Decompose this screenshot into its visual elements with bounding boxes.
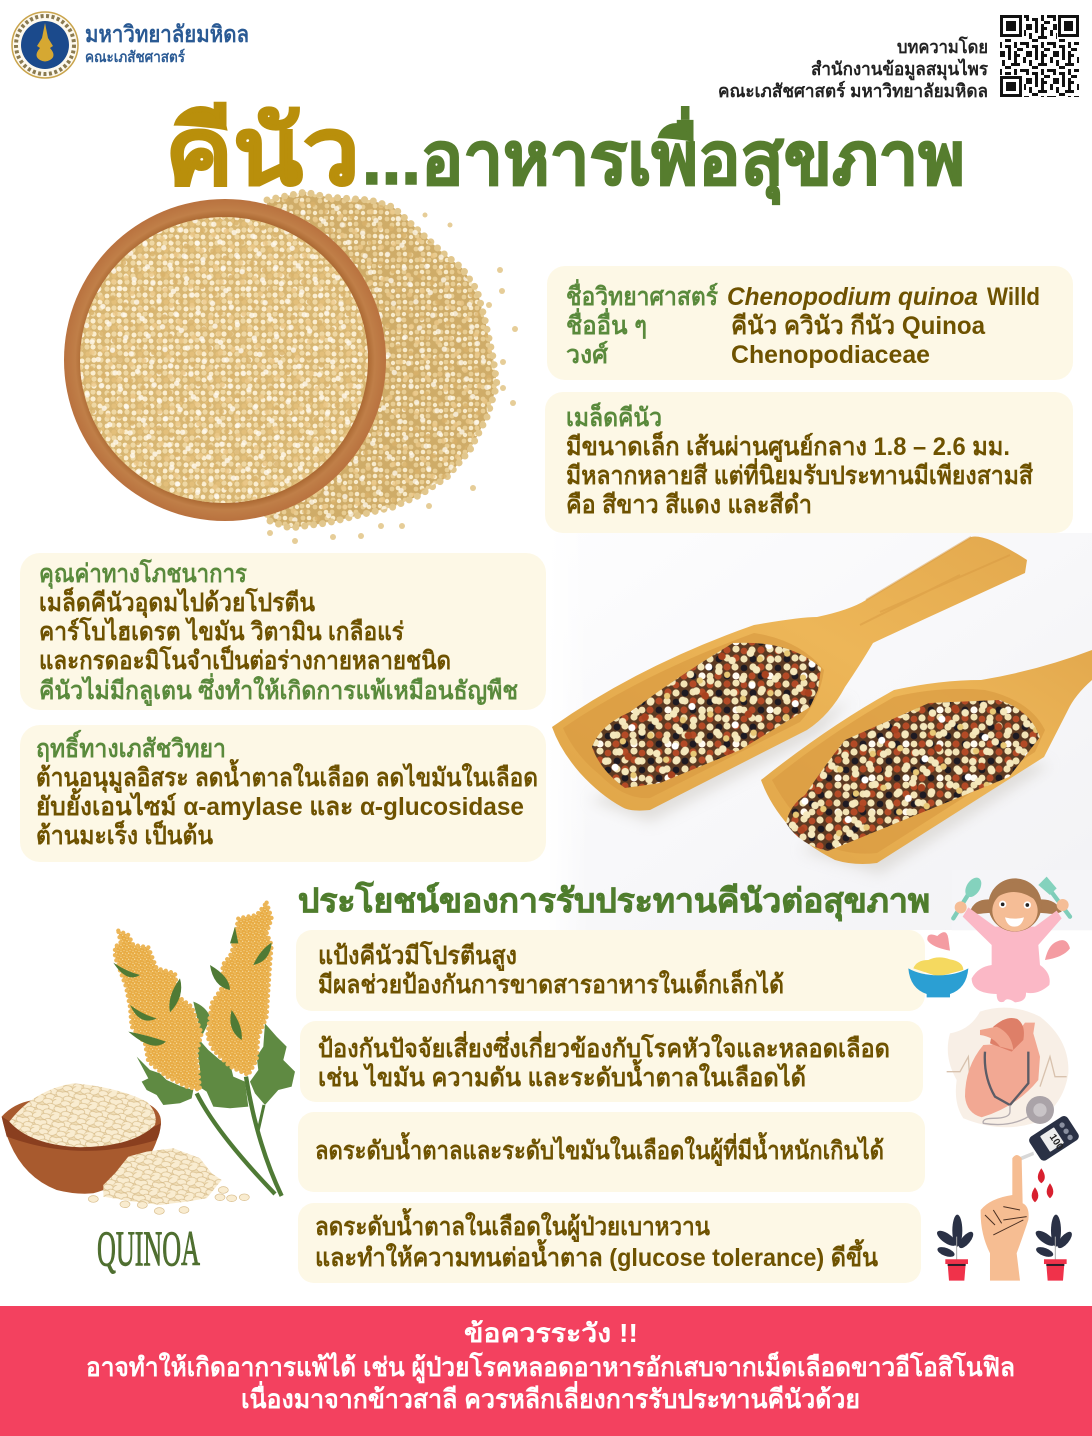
blood drops (1032, 1168, 1053, 1202)
panel: nutritional value: คาร์โบไฮเดรต ไขมัน วิตามิน เกลือแร่ (39, 616, 405, 646)
warning banner: เนื่องมาจากข้าวสาลี ควรหลีกเลี่ยงการรับประทานคีนัวด้วย (241, 1380, 860, 1414)
body (963, 907, 1062, 1002)
panel: quinoa seeds (545, 392, 1073, 533)
panel: nutritional value: คีนัวไม่มีกลูเตน ซึ่งทำให้เกิดการแพ้เหมือนธัญพืช (39, 673, 518, 707)
panel: quinoa seeds: เมล็ดคีนัว (566, 402, 662, 432)
panel: pharmacology: ยับยั้งเอนไซม์ α-amylase และ α-glucosidase (36, 787, 524, 821)
title: ...อาหารเพื่อสุขภาพ (362, 106, 965, 205)
panel: benefit 1: แป้งคีนัวมีโปรตีนสูง (318, 940, 517, 972)
panel: scientific name: Willd (987, 283, 1040, 311)
warning banner (0, 1306, 1092, 1436)
right scoop (761, 650, 1092, 864)
credit text: บทความโดย (897, 36, 988, 57)
stems (197, 1077, 282, 1196)
bowl (2, 1100, 161, 1194)
glucose meter (1027, 1114, 1081, 1162)
credit text: คณะเภสัชศาสตร์ มหาวิทยาลัยมหิดล (718, 80, 988, 101)
panel: scientific name: ชื่อวิทยาศาสตร์ (566, 279, 719, 311)
illustration: child eating (908, 870, 1092, 1002)
plume left (115, 931, 202, 1090)
panel: nutritional value: คุณค่าทางโภชนาการ (39, 558, 248, 590)
panel: scientific name: คีนัว ควินัว กีนัว Quinoa (731, 312, 986, 340)
panel: benefit 1: มีผลช่วยป้องกันการขาดสารอาหารในเด็กเล็กได้ (318, 969, 784, 999)
panel: quinoa seeds: มีหลากหลายสี แต่ที่นิยมรับประทานมีเพียงสามสี (566, 458, 1034, 490)
panel: benefit 4: และทำให้ความทนต่อน้ำตาล (glucose tolerance) ดีขึ้น (315, 1238, 878, 1272)
potted plant left (935, 1215, 976, 1281)
panel: scientific name: วงศ์ (566, 340, 609, 369)
panel: scientific name: Chenopodiaceae (731, 341, 930, 369)
credit text: สำนักงานข้อมูลสมุนไพร (811, 58, 988, 81)
illustration: heart and stethoscope (947, 1008, 1068, 1127)
panel: benefit 1 (296, 930, 925, 1011)
bowl of porridge (913, 957, 963, 977)
panel: benefit 2: เช่น ไขมัน ความดัน และระดับน้ำตาลในเลือดได้ (318, 1058, 806, 1092)
heading: health benefits: ประโยชน์ของการรับประทานคีนัวต่อสุขภาพ (298, 881, 930, 922)
credit text (718, 36, 988, 101)
panel: benefit 3: ลดระดับน้ำตาลและระดับไขมันในเลือดในผู้ที่มีน้ำหนักเกินได้ (315, 1131, 884, 1167)
photo: wooden scoops with mixed quinoa (548, 533, 1092, 930)
panel: benefit 4: ลดระดับน้ำตาลในเลือดในผู้ป่วยเบาหวาน (315, 1207, 710, 1243)
grains in bowl (9, 1083, 156, 1147)
potted plant right (1033, 1215, 1074, 1281)
panel: benefit 4 (298, 1203, 921, 1283)
panel: benefit 2: ป้องกันปัจจัยเสี่ยงซึ่งเกี่ยวข้องกับโรคหัวใจและหลอดเลือด (318, 1031, 890, 1063)
panel: nutritional value (20, 553, 546, 710)
left scoop (552, 536, 1027, 811)
title (165, 99, 965, 205)
label: QUINOA: QUINOA (97, 1220, 200, 1276)
panel: scientific name: Chenopodium quinoa (727, 283, 978, 311)
panel: scientific name: ชื่ออื่น ๆ (566, 308, 647, 340)
panel: pharmacology: ฤทธิ์ทางเภสัชวิทยา (36, 729, 226, 763)
illustration: blood glucose test (935, 1114, 1081, 1281)
panel: pharmacology: ต้านมะเร็ง เป็นต้น (36, 820, 213, 850)
plume right (207, 903, 272, 1075)
spoon and fork (953, 890, 1070, 918)
pigtails (970, 899, 995, 914)
logo: Mahidol University: มหาวิทยาลัยมหิดล (85, 21, 249, 47)
panel: pharmacology: ต้านอนุมูลอิสระ ลดน้ำตาลในเลือด ลดไขมันในเลือด (36, 758, 538, 794)
warning banner: อาจทำให้เกิดอาการแพ้ได้ เช่น ผู้ป่วยโรคหลอดอาหารอักเสบจากเม็ดเลือดขาวอีโอสิโนฟิล (86, 1351, 1015, 1384)
panel: nutritional value: เมล็ดคีนัวอุดมไปด้วยโปรตีน (39, 587, 315, 619)
hand (981, 1155, 1029, 1281)
hearts (927, 932, 950, 951)
photo: quinoa bowl (64, 192, 518, 544)
panel: scientific name (547, 266, 1073, 380)
hands (955, 899, 1069, 913)
panel: benefit 3 (298, 1112, 925, 1192)
panel: quinoa seeds: มีขนาดเล็ก เส้นผ่านศูนย์กลาง 1.8 – 2.6 มม. (566, 431, 1010, 463)
warning banner: ข้อควรระวัง !! (464, 1318, 638, 1348)
head (988, 878, 1042, 932)
illustration: quinoa plant and bowl (2, 903, 295, 1214)
glucose meter: 100 (1047, 1132, 1065, 1153)
panel: nutritional value: และกรดอะมิโนจำเป็นต่อร่างกายหลายชนิด (39, 645, 451, 675)
grain pile (103, 1148, 222, 1205)
small leaves (113, 927, 272, 1046)
QR code (999, 14, 1080, 98)
logo: Mahidol University: คณะเภสัชศาสตร์ (85, 48, 186, 66)
title: คีนัว (165, 99, 360, 204)
loose grains (88, 1187, 249, 1214)
leaves (137, 1002, 295, 1108)
panel: benefit 2 (300, 1021, 923, 1102)
panel: quinoa seeds: คือ สีขาว สีแดง และสีดำ (566, 491, 812, 519)
logo: Mahidol University (12, 12, 249, 78)
panel: pharmacology (20, 725, 546, 862)
